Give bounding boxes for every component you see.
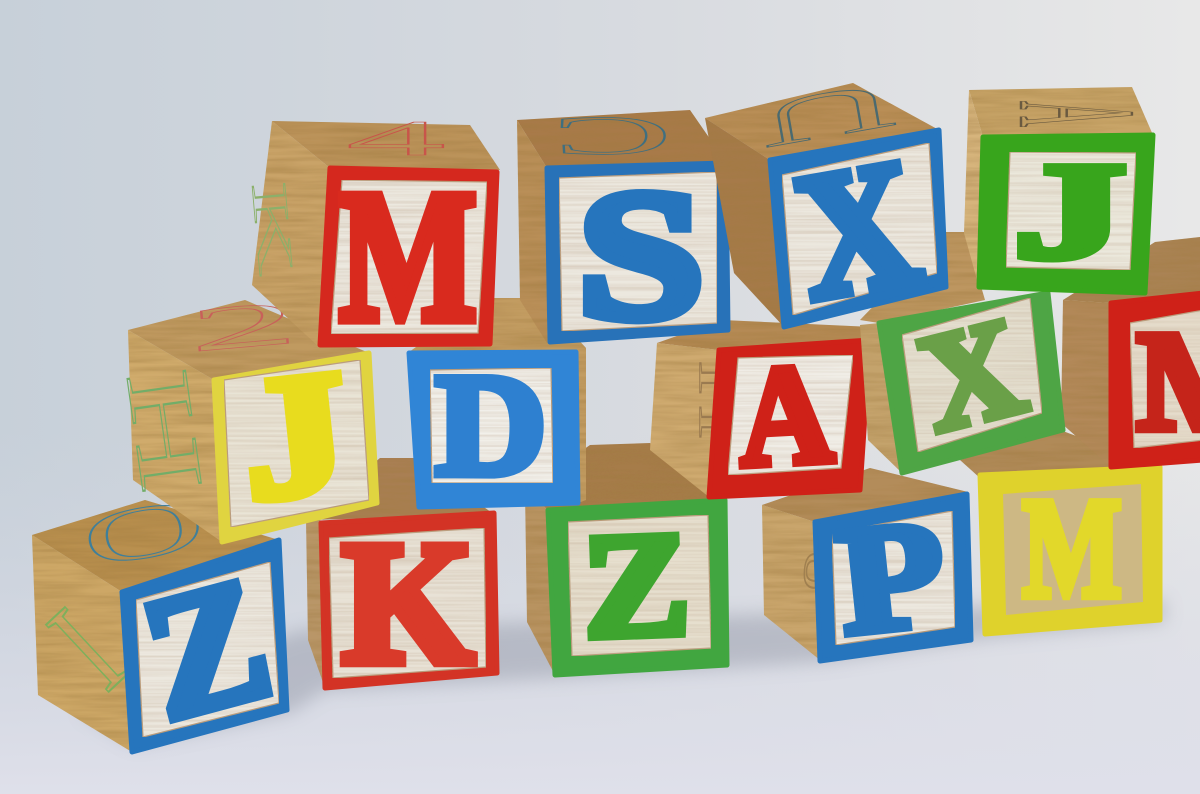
block: blue P <box>762 468 971 667</box>
contact shadows under blocks <box>80 600 1165 745</box>
block: blue S: S <box>578 152 704 357</box>
block: yellow J <box>107 287 377 542</box>
block: red M top: 4 <box>346 110 446 166</box>
block: blue X: X <box>783 121 932 338</box>
block: green J <box>964 87 1169 293</box>
block: blue Z: O <box>76 481 211 584</box>
block: yellow J: 2 <box>185 287 301 365</box>
block: blue X: U <box>754 68 902 163</box>
block: yellow M: M <box>1022 469 1122 628</box>
block: blue Z: Z <box>126 541 288 757</box>
block: red A <box>650 320 872 497</box>
block: red M right edge <box>1061 237 1200 467</box>
block: green J: A <box>984 101 1169 127</box>
block: red M top: M <box>340 153 476 360</box>
block: red M top <box>241 110 500 360</box>
block: green Z <box>525 443 727 675</box>
block: blue P: 8 <box>791 549 855 594</box>
block: blue D: D <box>435 345 547 506</box>
block: green J: J <box>1014 136 1126 287</box>
block: blue S <box>517 106 728 357</box>
block: blue P: P <box>831 488 953 667</box>
block: blue D <box>409 298 586 507</box>
block: blue X <box>705 68 946 338</box>
block: yellow J: J <box>233 334 357 537</box>
block: red A: A <box>734 333 837 497</box>
block: green X <box>860 232 1063 473</box>
block: red K <box>305 458 497 701</box>
block: red K: K <box>342 506 474 701</box>
block: green X: X <box>906 288 1038 461</box>
block: yellow J: H <box>107 363 222 499</box>
block: blue Z <box>22 481 288 757</box>
block: blue S: C <box>552 106 672 167</box>
block: blue Z: I <box>22 582 151 717</box>
block: red A: H <box>689 360 744 440</box>
block: yellow M <box>960 430 1160 634</box>
block: green Z: Z <box>580 501 692 670</box>
block: red M top: K <box>241 179 304 278</box>
